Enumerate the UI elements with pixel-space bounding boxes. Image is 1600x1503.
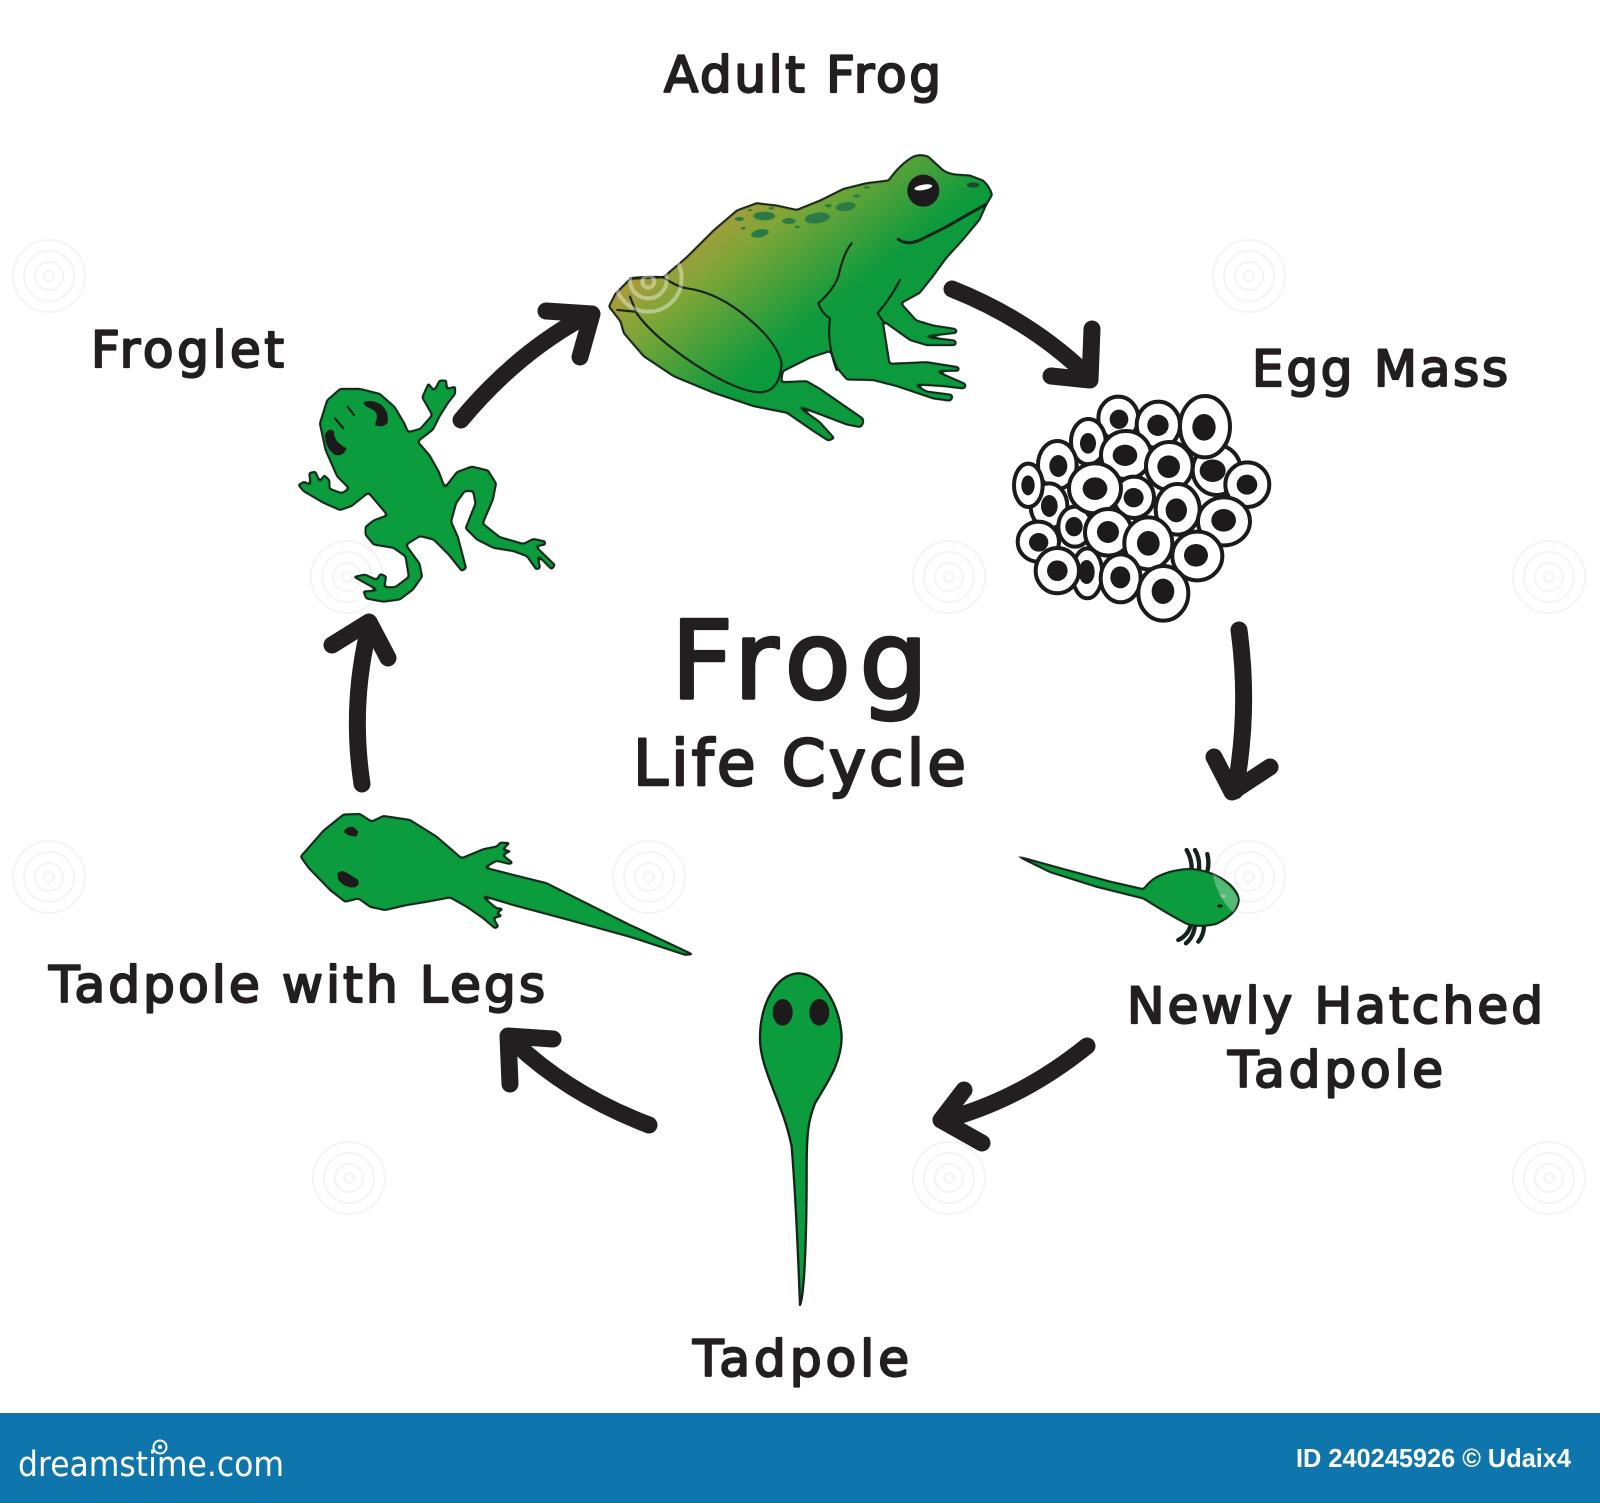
arrow: egg mass to newly hatched tadpole <box>1214 630 1270 792</box>
footer: image ID and credit: ID 240245926 © Udaix4 <box>1296 1443 1572 1473</box>
label: Froglet: Froglet <box>91 321 284 379</box>
arrow: froglet to adult frog <box>461 311 592 420</box>
icon: tadpole <box>760 973 842 1305</box>
label: Egg Mass: Egg Mass <box>1252 340 1508 398</box>
title: Frog Life Cycle <box>633 599 966 800</box>
label: Newly Hatched Tadpole: Newly Hatched <box>1127 977 1543 1035</box>
label: Tadpole with Legs: Tadpole with Legs <box>48 956 545 1014</box>
title: Frog Life Cycle: Life Cycle <box>633 727 966 800</box>
icon: adult frog <box>608 155 993 441</box>
label: Newly Hatched Tadpole: Tadpole <box>1227 1041 1443 1099</box>
icon: tadpole with legs <box>300 813 694 955</box>
arrow: tadpole with legs to froglet <box>332 622 388 784</box>
icon: egg mass <box>1014 396 1269 621</box>
arrow: tadpole to tadpole with legs <box>508 1036 649 1125</box>
label: Tadpole: Tadpole <box>692 1330 909 1388</box>
footer: dreamstime logo: dreamstime.com <box>18 1445 284 1485</box>
footer bar <box>0 1413 1600 1503</box>
title: Frog Life Cycle: Frog <box>671 599 928 724</box>
label: Newly Hatched Tadpole <box>1127 977 1543 1099</box>
arrow: newly hatched tadpole to tadpole <box>941 1046 1087 1143</box>
label: Adult Frog: Adult Frog <box>664 46 941 104</box>
icon: newly hatched tadpole <box>1013 850 1239 943</box>
icon: froglet <box>298 380 556 602</box>
arrow: adult frog to egg mass <box>952 289 1092 380</box>
